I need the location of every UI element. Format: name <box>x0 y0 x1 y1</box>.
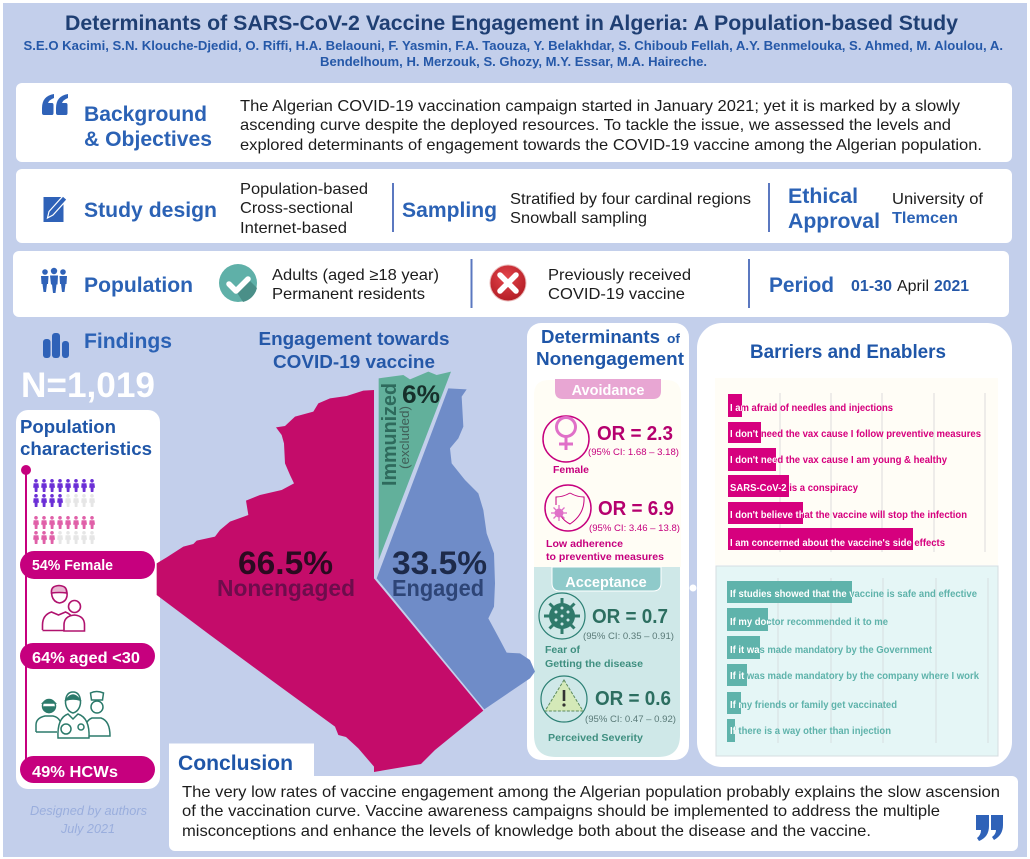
odds ratio: low adherence: (95% CI: 3.46 – 13.8) <box>589 523 680 534</box>
text: period dates: April <box>897 278 929 295</box>
odds ratio: fear of getting the disease: Getting the disease <box>545 659 643 670</box>
heading: ethical approval: Approval <box>788 210 880 233</box>
odds ratio: low adherence <box>546 498 680 563</box>
map segment: engaged: Engaged <box>392 575 484 601</box>
heading: background and objectives: & Objectives <box>84 128 212 151</box>
panel: determinants of nonengagement <box>527 323 696 760</box>
text: conclusion: The very low rates of vaccine engagement among the Algerian population probably explains the slow ascension <box>182 784 1000 801</box>
heading: sampling: Sampling <box>402 199 497 222</box>
credit: July 2021 <box>60 822 115 836</box>
heading: engagement towards COVID-19 vaccine <box>258 328 450 372</box>
icon: cross mark <box>490 265 526 301</box>
map segment: nonengaged: 66.5% <box>238 545 333 581</box>
text: exclusion criteria: COVID-19 vaccine <box>548 286 685 303</box>
odds ratio: female: (95% CI: 1.68 – 3.18) <box>588 447 679 458</box>
label: 54% female: 54% Female <box>32 558 113 574</box>
text: period dates <box>851 278 969 295</box>
chart: barriers: I am concerned about the vaccine's side effects <box>730 538 945 549</box>
text: conclusion: misconceptions and enhance the levels of knowledge both about the disease and the vaccine. <box>182 823 871 840</box>
map segment: immunized <box>379 372 451 560</box>
odds ratio: female: OR = 2.3 <box>597 423 673 445</box>
heading: population: Population <box>84 274 193 297</box>
text: sampling list: Stratified by four cardinal regions <box>510 191 751 208</box>
icon: check mark <box>219 264 257 302</box>
icon: adult and child <box>42 586 84 631</box>
section: avoidance: Avoidance <box>572 383 644 399</box>
chart: barriers: I don't need the vax cause I follow preventive measures <box>730 429 981 440</box>
odds ratio: low adherence: to preventive measures <box>546 552 664 563</box>
section: acceptance <box>534 567 680 757</box>
sample size: N=1,019 <box>21 366 155 405</box>
text: inclusion criteria <box>272 267 439 303</box>
label: 64% aged under 30 <box>20 643 155 669</box>
odds ratio: fear of getting the disease <box>545 606 674 670</box>
chart: enablers: If it was made mandatory by the Government <box>730 645 933 656</box>
heading: population characteristics <box>20 416 152 459</box>
icon: virus <box>539 593 585 639</box>
odds ratio: perceived severity: (95% CI: 0.47 – 0.92) <box>585 714 676 725</box>
heading: determinants: Determinants <box>541 326 660 347</box>
chart: enablers: If it was made mandatory by the company where I work <box>730 671 979 682</box>
credit: Designed by authors <box>30 804 147 818</box>
label: 49% health care workers: 49% HCWs <box>32 764 118 781</box>
icon: opening quote <box>42 94 68 115</box>
map segment: engaged <box>377 388 535 709</box>
odds ratio: low adherence: OR = 6.9 <box>598 498 674 520</box>
chart: barriers: I don't believe that the vaccine will stop the infection <box>730 510 967 521</box>
icon: people group <box>41 268 67 293</box>
chart: enablers: If there is a way other than injection <box>730 726 891 737</box>
text: background: ascending curve despite the deployed resources. To tackle the issue, we assessed the levels and <box>240 117 951 134</box>
text: conclusion: of the vaccination curve. Vaccine awareness campaigns should be implemented to address the multiple <box>182 803 940 820</box>
text: study design list <box>240 181 368 237</box>
chart: enablers: If my friends or family get vaccinated <box>730 700 897 711</box>
odds ratio: fear of getting the disease: Fear of <box>545 645 581 656</box>
map segment: immunized: 6% <box>402 381 440 409</box>
heading: study design: Study design <box>84 199 217 222</box>
text: study design list: Internet-based <box>240 220 347 237</box>
text: background <box>240 98 982 154</box>
title: Determinants of SARS-CoV-2 Vaccine Engagement in Algeria: A Population-based Study <box>65 11 958 35</box>
text: exclusion criteria: Previously received <box>548 267 691 284</box>
text: exclusion criteria <box>548 267 691 303</box>
label: 54% female <box>20 551 155 579</box>
text: university: University of <box>892 191 984 208</box>
text: sampling list <box>510 191 751 227</box>
text: background: The Algerian COVID-19 vaccination campaign started in January 2021; yet it is marked by a slowly <box>240 98 960 115</box>
text: background: explored determinants of engagement towards the COVID-19 vaccine among the Algerian population. <box>240 137 982 154</box>
credit <box>30 804 147 836</box>
authors: Bendelhoum, H. Merzouk, S. Ghozy, M.Y. Essar, M.A. Haireche. <box>320 55 707 69</box>
label: 49% health care workers <box>20 756 155 783</box>
odds ratio: female <box>553 423 679 476</box>
odds ratio: low adherence: Low adherence <box>546 539 623 550</box>
chart: enablers: If studies showed that the vaccine is safe and effective <box>730 589 977 600</box>
icon: shield with virus <box>545 485 591 531</box>
icon: bar chart <box>43 333 69 358</box>
text: university <box>892 191 984 227</box>
icon: pencil on document <box>44 196 67 222</box>
icon: warning triangle <box>541 676 587 722</box>
chart: enablers: If my doctor recommended it to me <box>730 617 888 628</box>
heading: findings: Findings <box>84 330 172 353</box>
heading: engagement towards COVID-19 vaccine: Engagement towards <box>258 328 450 349</box>
odds ratio: female: Female <box>553 465 589 476</box>
heading: population characteristics: Population <box>20 416 116 437</box>
panel: barriers and enablers <box>697 323 1012 767</box>
odds ratio: perceived severity: OR = 0.6 <box>595 688 671 710</box>
authors: S.E.O Kacimi, S.N. Klouche-Djedid, O. Riffi, H.A. Belaouni, F. Yasmin, F.A. Taouza, Y. Belakhdar, S. Chiboub Fellah, A.Y. Benmelouka, S. Ahmed, M. Aloulou, A. <box>24 39 1003 53</box>
text: inclusion criteria: Permanent residents <box>272 286 425 303</box>
map segment: immunized: Immunized <box>379 383 401 486</box>
panel: population <box>13 251 1009 317</box>
text: study design list: Cross-sectional <box>240 200 353 217</box>
panel: population characteristics <box>16 410 160 789</box>
odds ratio: perceived severity <box>548 688 676 744</box>
heading: determinants <box>536 326 684 369</box>
text: sampling list: Snowball sampling <box>510 210 647 227</box>
icon: health care workers <box>36 692 110 738</box>
text: study design list: Population-based <box>240 181 368 198</box>
heading: population characteristics: characteristics <box>20 438 152 459</box>
map segment: nonengaged: Nonengaged <box>217 575 355 601</box>
icon: female population <box>33 516 95 544</box>
section: avoidance <box>534 379 681 567</box>
chart: barriers: I am afraid of needles and injections <box>730 403 893 414</box>
text: inclusion criteria: Adults (aged ≥18 year) <box>272 267 439 284</box>
text: period dates: 2021 <box>934 278 969 295</box>
heading: conclusion: Conclusion <box>178 752 293 775</box>
panel: background and objectives <box>16 83 1012 162</box>
chart: barriers: I don't need the vax cause I am young & healthy <box>730 455 947 466</box>
map segment: nonengaged <box>157 390 483 772</box>
heading: engagement towards COVID-19 vaccine: COVID-19 vaccine <box>273 351 435 372</box>
authors <box>24 39 1003 69</box>
chart: barriers: SARS-CoV-2 is a conspiracy <box>730 483 858 494</box>
heading: background and objectives: Background <box>84 103 207 126</box>
odds ratio: fear of getting the disease: (95% CI: 0.35 – 0.91) <box>583 631 674 642</box>
panel: conclusion <box>169 744 1018 851</box>
label: 64% aged under 30: 64% aged <30 <box>32 650 140 667</box>
heading: barriers and enablers: Barriers and Enablers <box>750 342 946 363</box>
heading: determinants: of <box>667 332 681 346</box>
map segment: engaged: 33.5% <box>392 545 487 581</box>
text: university: Tlemcen <box>892 210 958 227</box>
icon: female symbol <box>543 416 589 462</box>
heading: period: Period <box>769 274 834 297</box>
chart: barriers <box>715 378 998 565</box>
odds ratio: perceived severity: Perceived Severity <box>548 733 643 744</box>
panel: study design <box>16 169 1012 243</box>
icon: closing quote <box>976 815 1003 841</box>
map segment: immunized: (excluded) <box>397 406 412 469</box>
heading: findings <box>43 330 172 358</box>
heading: ethical approval: Ethical <box>788 185 858 208</box>
text: period dates: 01-30 <box>851 278 892 295</box>
chart: enablers <box>716 566 998 756</box>
heading: background and objectives <box>84 103 212 151</box>
icon: male population <box>33 479 95 507</box>
map: Algeria engagement pie <box>157 372 535 772</box>
section: acceptance: Acceptance <box>565 575 647 591</box>
heading: ethical approval <box>788 185 880 233</box>
heading: determinants: Nonengagement <box>536 348 684 369</box>
odds ratio: fear of getting the disease: OR = 0.7 <box>592 606 668 628</box>
text: conclusion <box>182 784 1000 840</box>
